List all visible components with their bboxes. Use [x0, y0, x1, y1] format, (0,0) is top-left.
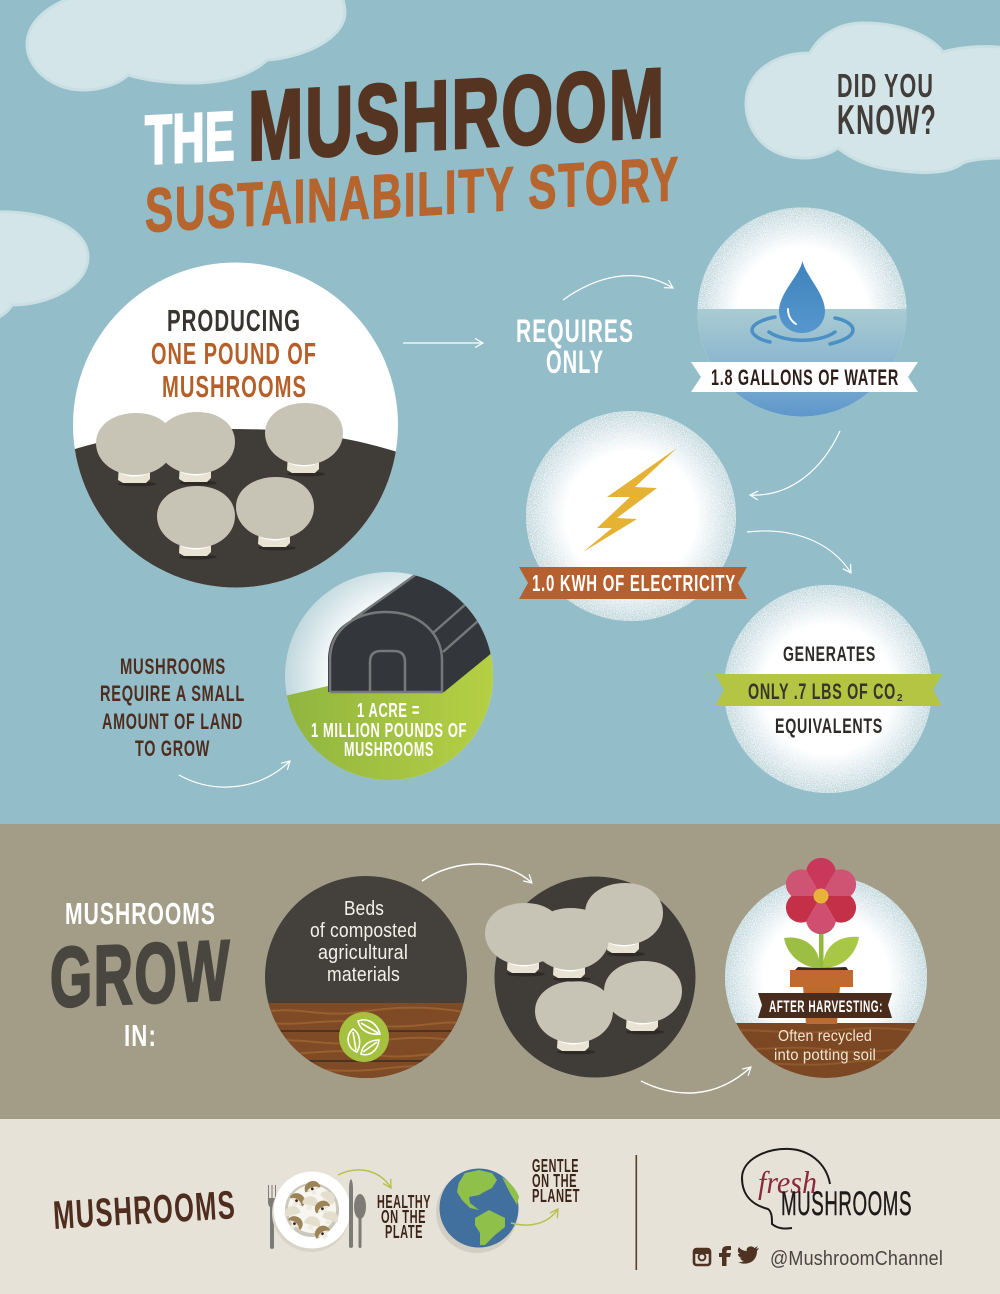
- banner: only .7 lbs of co2: ONLY .7 LBS OF CO: [748, 679, 896, 704]
- icon: plate with mushrooms and cutlery: [268, 1172, 366, 1252]
- text: social handle: @MushroomChannel: [770, 1248, 943, 1270]
- did you know text: [837, 67, 937, 143]
- mushroom slices: [283, 1179, 340, 1243]
- icon: instagram: [694, 1249, 710, 1265]
- banner: 1.0 kwh of electricity: 1.0 KWH OF ELECTRICITY: [532, 570, 736, 596]
- title word: mushroom: MUSHROOM: [248, 47, 666, 181]
- icon: flower in pot: [781, 858, 861, 1024]
- title word: the: THE: [145, 96, 235, 179]
- title: [145, 47, 680, 246]
- panel: co2 equivalents: [715, 585, 942, 793]
- banner: 1.8 gallons of water: [691, 362, 918, 392]
- heading: producing one pound of mushrooms: PRODUCING: [167, 303, 301, 338]
- banner: only .7 lbs of co2: 2: [897, 693, 903, 704]
- text: gentle on the planet: ON THE: [532, 1171, 577, 1191]
- banner: after harvesting: [758, 993, 892, 1018]
- footer heading: mushrooms: MUSHROOMS: [52, 1183, 237, 1238]
- panel: one pound of mushrooms: [73, 262, 398, 588]
- arrow: beds to mushrooms: [422, 864, 532, 883]
- banner: only .7 lbs of co2: [715, 674, 942, 706]
- heading: mushrooms grow in: GROW: [50, 923, 231, 1026]
- soil: [736, 1023, 916, 1078]
- heading: producing one pound of mushrooms: ONE POUND OF: [151, 336, 317, 371]
- panel: growing mushrooms: [485, 876, 696, 1078]
- section band: mushrooms grow in: [0, 824, 1000, 1119]
- panel: one acre greenhouse: [285, 572, 493, 780]
- text: gentle on the planet: PLANET: [532, 1186, 580, 1206]
- banner: 1.8 gallons of water: 1.8 GALLONS OF WATER: [711, 365, 899, 390]
- panel: after harvesting: [720, 858, 932, 1083]
- icon: twitter: [738, 1246, 759, 1264]
- footer divider: [636, 1155, 637, 1270]
- text: generates: GENERATES: [783, 643, 876, 666]
- banner: after harvesting: AFTER HARVESTING:: [769, 997, 883, 1016]
- cloud: left: [0, 212, 88, 319]
- icon: water drop: [752, 261, 853, 344]
- icon: globe: [436, 1168, 519, 1253]
- text: beds of composted agricultural materials: [310, 898, 417, 986]
- heading: producing one pound of mushrooms: MUSHROOMS: [162, 369, 307, 404]
- subtitle: SUSTAINABILITY STORY: [145, 145, 680, 246]
- mushrooms illustration: [96, 403, 343, 560]
- text: beds of composted agricultural materials: Beds: [344, 898, 384, 920]
- arrow: to requires only: [403, 342, 483, 344]
- heading: producing one pound of mushrooms: [151, 303, 317, 404]
- text: healthy on the plate: ON THE: [381, 1207, 426, 1227]
- logo: fresh mushrooms: fresh: [758, 1164, 817, 1200]
- footer background: [0, 1119, 1000, 1294]
- sky background: [0, 0, 1000, 824]
- banner: 1.0 kwh of electricity: [519, 567, 747, 599]
- greenhouse illustration: [286, 575, 493, 780]
- text: requires only: REQUIRES: [516, 313, 634, 349]
- text: equivalents: EQUIVALENTS: [775, 715, 883, 738]
- icon: recycling leaves: [339, 1012, 389, 1062]
- arrow: water to electricity: [750, 431, 840, 495]
- text: gentle on the planet: [532, 1156, 580, 1206]
- cloud: did you know: [746, 23, 1000, 172]
- text: 1 acre = 1 million pounds of mushrooms: 1 ACRE =: [357, 700, 420, 722]
- social icons: [694, 1246, 759, 1266]
- text: healthy on the plate: PLATE: [385, 1222, 423, 1242]
- did you know text: DID YOU: [837, 67, 934, 104]
- knife: [349, 1179, 353, 1248]
- text: gentle on the planet: GENTLE: [532, 1156, 579, 1176]
- arrow: electricity to co2: [747, 531, 851, 573]
- text: healthy on the plate: HEALTHY: [377, 1192, 431, 1212]
- arrow: plate to healthy: [338, 1170, 391, 1188]
- arrow: to water: [563, 276, 673, 300]
- text: often recycled into potting soil: into potting soil: [774, 1047, 876, 1064]
- panel: compost beds: [260, 876, 472, 1083]
- text: mushrooms require a small amount of land to grow: [100, 654, 245, 761]
- text: 1 acre = 1 million pounds of mushrooms: 1 MILLION POUNDS OF: [311, 720, 467, 742]
- wood planks: [268, 1003, 464, 1078]
- logo: fresh mushrooms: [742, 1149, 912, 1229]
- spoon: [354, 1194, 366, 1248]
- cloud: top left: [27, 0, 345, 90]
- heading: mushrooms grow in: MUSHROOMS: [65, 896, 216, 931]
- text: mushrooms require a small amount of land to grow: TO GROW: [135, 736, 210, 761]
- fork: [268, 1185, 276, 1249]
- text: 1 acre = 1 million pounds of mushrooms: [311, 700, 467, 761]
- panel: water: [690, 208, 918, 419]
- text: mushrooms require a small amount of land to grow: MUSHROOMS: [120, 654, 226, 679]
- icon: facebook: [719, 1246, 731, 1266]
- text: beds of composted agricultural materials: materials: [327, 964, 400, 986]
- heading: mushrooms grow in: [50, 896, 231, 1053]
- text: beds of composted agricultural materials: of composted: [310, 920, 417, 942]
- text: mushrooms require a small amount of land to grow: AMOUNT OF LAND: [102, 709, 243, 734]
- arrow: globe to gentle: [511, 1209, 558, 1225]
- text: often recycled into potting soil: Often recycled: [778, 1028, 872, 1045]
- arrow: to land circle: [179, 761, 290, 787]
- text: often recycled into potting soil: [774, 1028, 876, 1064]
- text: beds of composted agricultural materials: agricultural: [318, 942, 408, 964]
- panel: electricity: [519, 411, 747, 621]
- arrow: mushrooms to harvesting: [641, 1067, 751, 1093]
- mushrooms illustration: [485, 883, 682, 1054]
- text: mushrooms require a small amount of land to grow: REQUIRE A SMALL: [100, 681, 245, 706]
- icon: lightning bolt: [583, 448, 677, 552]
- text: requires only: ONLY: [546, 344, 604, 380]
- text: 1 acre = 1 million pounds of mushrooms: MUSHROOMS: [344, 739, 434, 761]
- text: requires only: [516, 313, 634, 380]
- heading: mushrooms grow in: IN:: [124, 1018, 157, 1053]
- text: healthy on the plate: [377, 1192, 431, 1242]
